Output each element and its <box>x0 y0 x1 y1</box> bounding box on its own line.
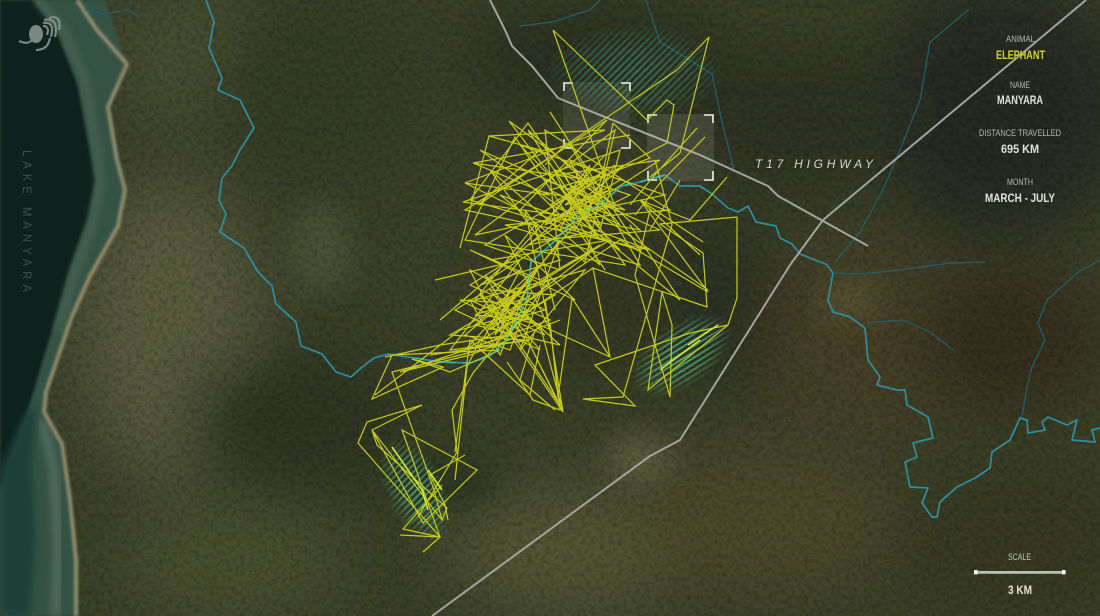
trail: link between clusters <box>470 210 610 350</box>
roads <box>432 0 1086 616</box>
name label: NAME <box>1010 80 1030 91</box>
trail: southern cluster <box>440 260 560 355</box>
focus boxes with corner brackets <box>563 82 714 181</box>
focus box 1 <box>563 82 630 149</box>
logo: elephant icon <box>19 17 60 50</box>
tributaries <box>85 0 1100 417</box>
trail: western spurs <box>375 260 560 395</box>
scale bar <box>974 552 1066 597</box>
highway label: T17 HIGHWAY <box>755 157 874 171</box>
crossing road <box>432 0 1086 616</box>
zone: south-east <box>634 314 730 395</box>
scale value: 3 KM <box>1008 583 1032 597</box>
main river channel <box>206 0 1100 517</box>
trail: northern cluster dense core <box>535 160 630 235</box>
zone: south-west <box>380 439 450 541</box>
distance value: 695 KM <box>1001 142 1039 156</box>
rivers <box>85 0 1100 517</box>
lime highlights inside zones <box>392 325 718 510</box>
trail: northern cluster long diagonals <box>465 112 640 270</box>
month value: MARCH - JULY <box>985 191 1056 205</box>
trail: northern cluster outer <box>460 120 670 270</box>
animal label: ANIMAL <box>1006 34 1036 45</box>
info panel <box>979 34 1061 205</box>
T17 highway <box>490 0 868 246</box>
scale label: SCALE <box>1008 552 1031 563</box>
river glimpses through the trail <box>415 175 665 363</box>
scale line <box>974 570 1066 574</box>
trail: eastern zig-zags <box>600 200 708 300</box>
name value: MANYARA <box>997 93 1043 107</box>
Lake Manyara water and coast <box>0 0 127 616</box>
zone: north <box>552 26 718 118</box>
lake label: LAKE MANYARA <box>20 150 32 292</box>
trail: northern excursions <box>545 30 727 220</box>
month label: MONTH <box>1007 177 1033 188</box>
trail: south-west walk <box>358 340 500 552</box>
animal value: ELEPHANT <box>996 48 1045 62</box>
hatched tracking zones <box>365 15 745 550</box>
trail: eastern loop <box>500 160 737 412</box>
distance label: DISTANCE TRAVELLED <box>979 128 1061 139</box>
focus box 2 <box>647 114 714 181</box>
trail: southern spokes <box>455 300 563 452</box>
elephant movement trail <box>358 30 737 552</box>
